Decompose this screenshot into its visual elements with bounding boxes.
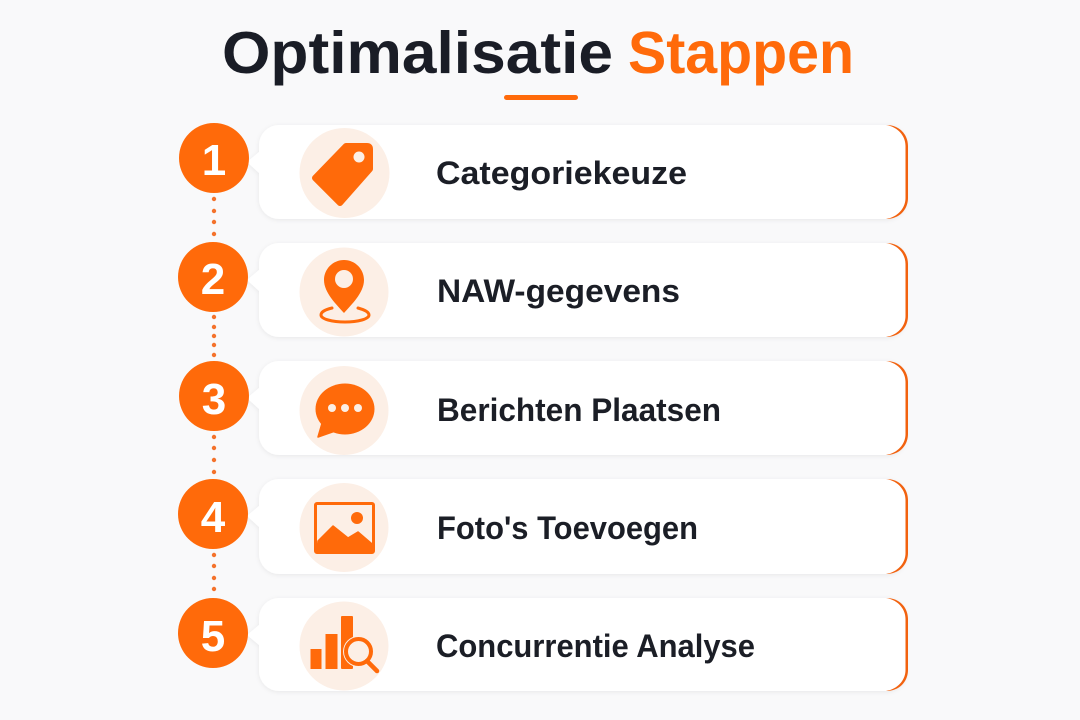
icon: bar chart with magnifier <box>300 602 388 690</box>
card 3 <box>247 361 906 455</box>
step 5 <box>178 598 908 691</box>
number badge 5: 5 <box>201 612 225 661</box>
dotted connector: steps 4 to 5 <box>212 553 216 591</box>
number badge 2: 2 <box>201 255 225 304</box>
step 4 <box>178 479 908 574</box>
step 3 <box>179 361 908 455</box>
card 1 accent <box>886 125 908 219</box>
card 4 <box>247 479 906 574</box>
title underline <box>504 95 578 100</box>
title: Optimalisatie <box>222 20 613 86</box>
number badge 4: 4 <box>201 493 226 542</box>
step 1 <box>179 123 908 219</box>
label 3: Berichten Plaatsen <box>437 392 721 428</box>
dotted connector: steps 1 to 2 <box>212 197 216 236</box>
number badge 4 <box>178 479 248 549</box>
label 4: Foto's Toevoegen <box>437 510 698 546</box>
icon: speech bubble <box>300 366 388 455</box>
number badge 5 <box>178 598 248 668</box>
number badge 1: 1 <box>202 136 226 185</box>
number badge 3: 3 <box>202 375 226 424</box>
card 2 accent <box>886 243 908 337</box>
card 1 <box>247 125 906 219</box>
number badge 2 <box>178 242 248 312</box>
title <box>222 20 854 86</box>
dotted connector: steps 3 to 4 <box>212 435 216 474</box>
label 1: Categoriekeuze <box>436 155 687 191</box>
label 5: Concurrentie Analyse <box>436 628 755 664</box>
label 2: NAW-gegevens <box>437 273 680 309</box>
title: Stappen <box>628 20 854 86</box>
card 4 accent <box>886 479 908 574</box>
card 3 accent <box>886 361 908 455</box>
step 2 <box>178 242 908 337</box>
number badge 1 <box>179 123 249 193</box>
icon: location pin <box>300 248 388 336</box>
icon: price tag <box>300 128 390 218</box>
card 5 <box>247 598 906 691</box>
card 2 <box>247 243 906 337</box>
card 5 accent <box>886 598 908 691</box>
icon: image <box>300 483 388 572</box>
number badge 3 <box>179 361 249 431</box>
dotted connector: steps 2 to 3 <box>212 315 216 357</box>
